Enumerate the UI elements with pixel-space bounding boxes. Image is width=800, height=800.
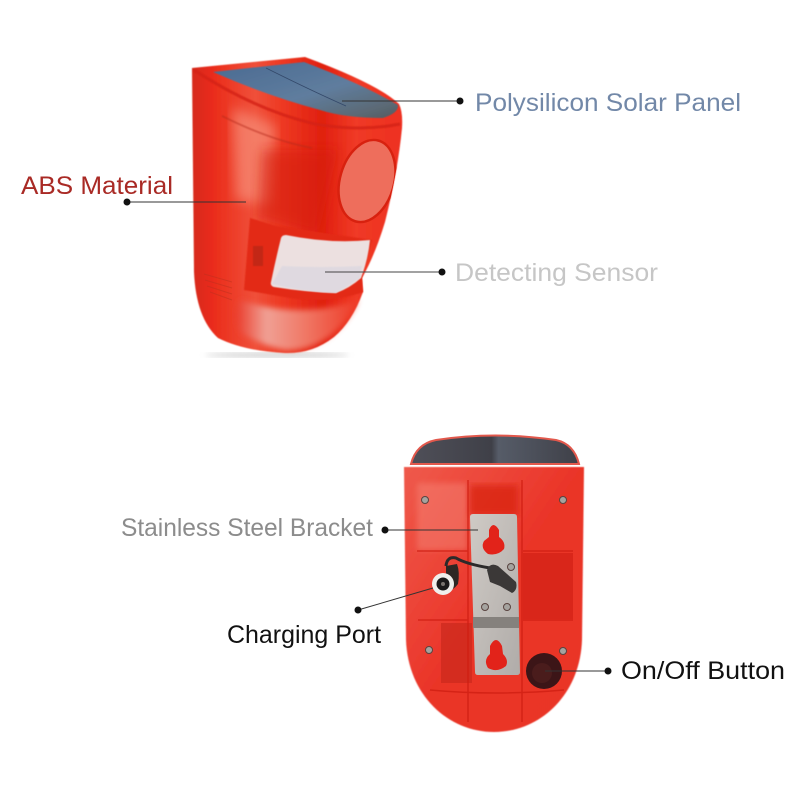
keyhole slot xyxy=(486,640,507,670)
cable and connector xyxy=(446,558,516,593)
rear window light xyxy=(417,483,467,550)
sensor housing xyxy=(244,218,372,300)
bracket notch xyxy=(253,246,263,266)
speaker disc xyxy=(338,138,396,224)
label: Detecting Sensor: Detecting Sensor xyxy=(455,259,658,287)
label: Stainless Steel Bracket: Stainless Steel Bracket xyxy=(121,514,373,542)
label: Polysilicon Solar Panel xyxy=(342,89,741,117)
rear panel grid xyxy=(417,480,573,722)
PIR sensor xyxy=(271,235,370,293)
inner wire xyxy=(222,116,312,148)
icon: rear view of solar alarm device xyxy=(404,436,584,732)
dark insets xyxy=(523,553,573,619)
label: ABS Material: ABS Material xyxy=(21,172,173,200)
charging port xyxy=(432,564,459,595)
lower lens xyxy=(236,300,358,350)
label: On/Off Button: On/Off Button xyxy=(621,657,785,685)
body shade xyxy=(258,150,338,235)
screws xyxy=(422,496,566,654)
label: Charging Port xyxy=(227,588,433,649)
body highlight xyxy=(232,108,276,205)
rear solar panel xyxy=(411,436,579,464)
label: ABS Material xyxy=(21,172,246,206)
label: Detecting Sensor xyxy=(325,259,658,287)
label: On/Off Button xyxy=(545,657,785,685)
bracket xyxy=(470,514,520,675)
rear body xyxy=(404,467,584,732)
label: Polysilicon Solar Panel: Polysilicon Solar Panel xyxy=(475,89,741,117)
keyhole slot xyxy=(483,525,504,554)
panel rim xyxy=(194,70,400,128)
speaker grille xyxy=(204,274,232,300)
icon: front view of solar alarm device xyxy=(192,57,405,358)
rear center shade xyxy=(470,485,518,515)
on/off button xyxy=(526,653,562,689)
solar panel xyxy=(213,62,398,118)
label: Charging Port: Charging Port xyxy=(227,621,381,649)
device shadow xyxy=(205,352,349,358)
device body xyxy=(192,57,402,353)
